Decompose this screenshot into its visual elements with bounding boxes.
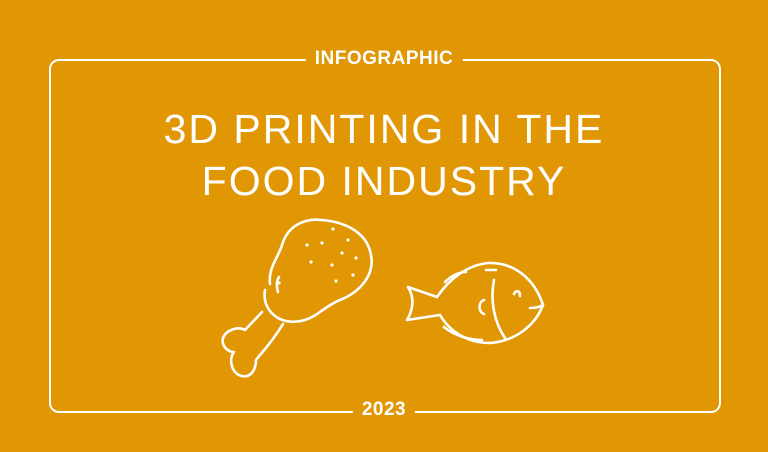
title [164, 106, 604, 204]
frame [49, 59, 721, 413]
icon: fish [407, 263, 543, 343]
icon: chicken drumstick [223, 220, 372, 376]
label: year: 2023 [362, 399, 406, 420]
label: infographic: INFOGRAPHIC [315, 48, 453, 69]
label: year [353, 399, 415, 421]
title: 3D PRINTING IN THE [164, 106, 604, 152]
title: FOOD INDUSTRY [202, 158, 566, 204]
